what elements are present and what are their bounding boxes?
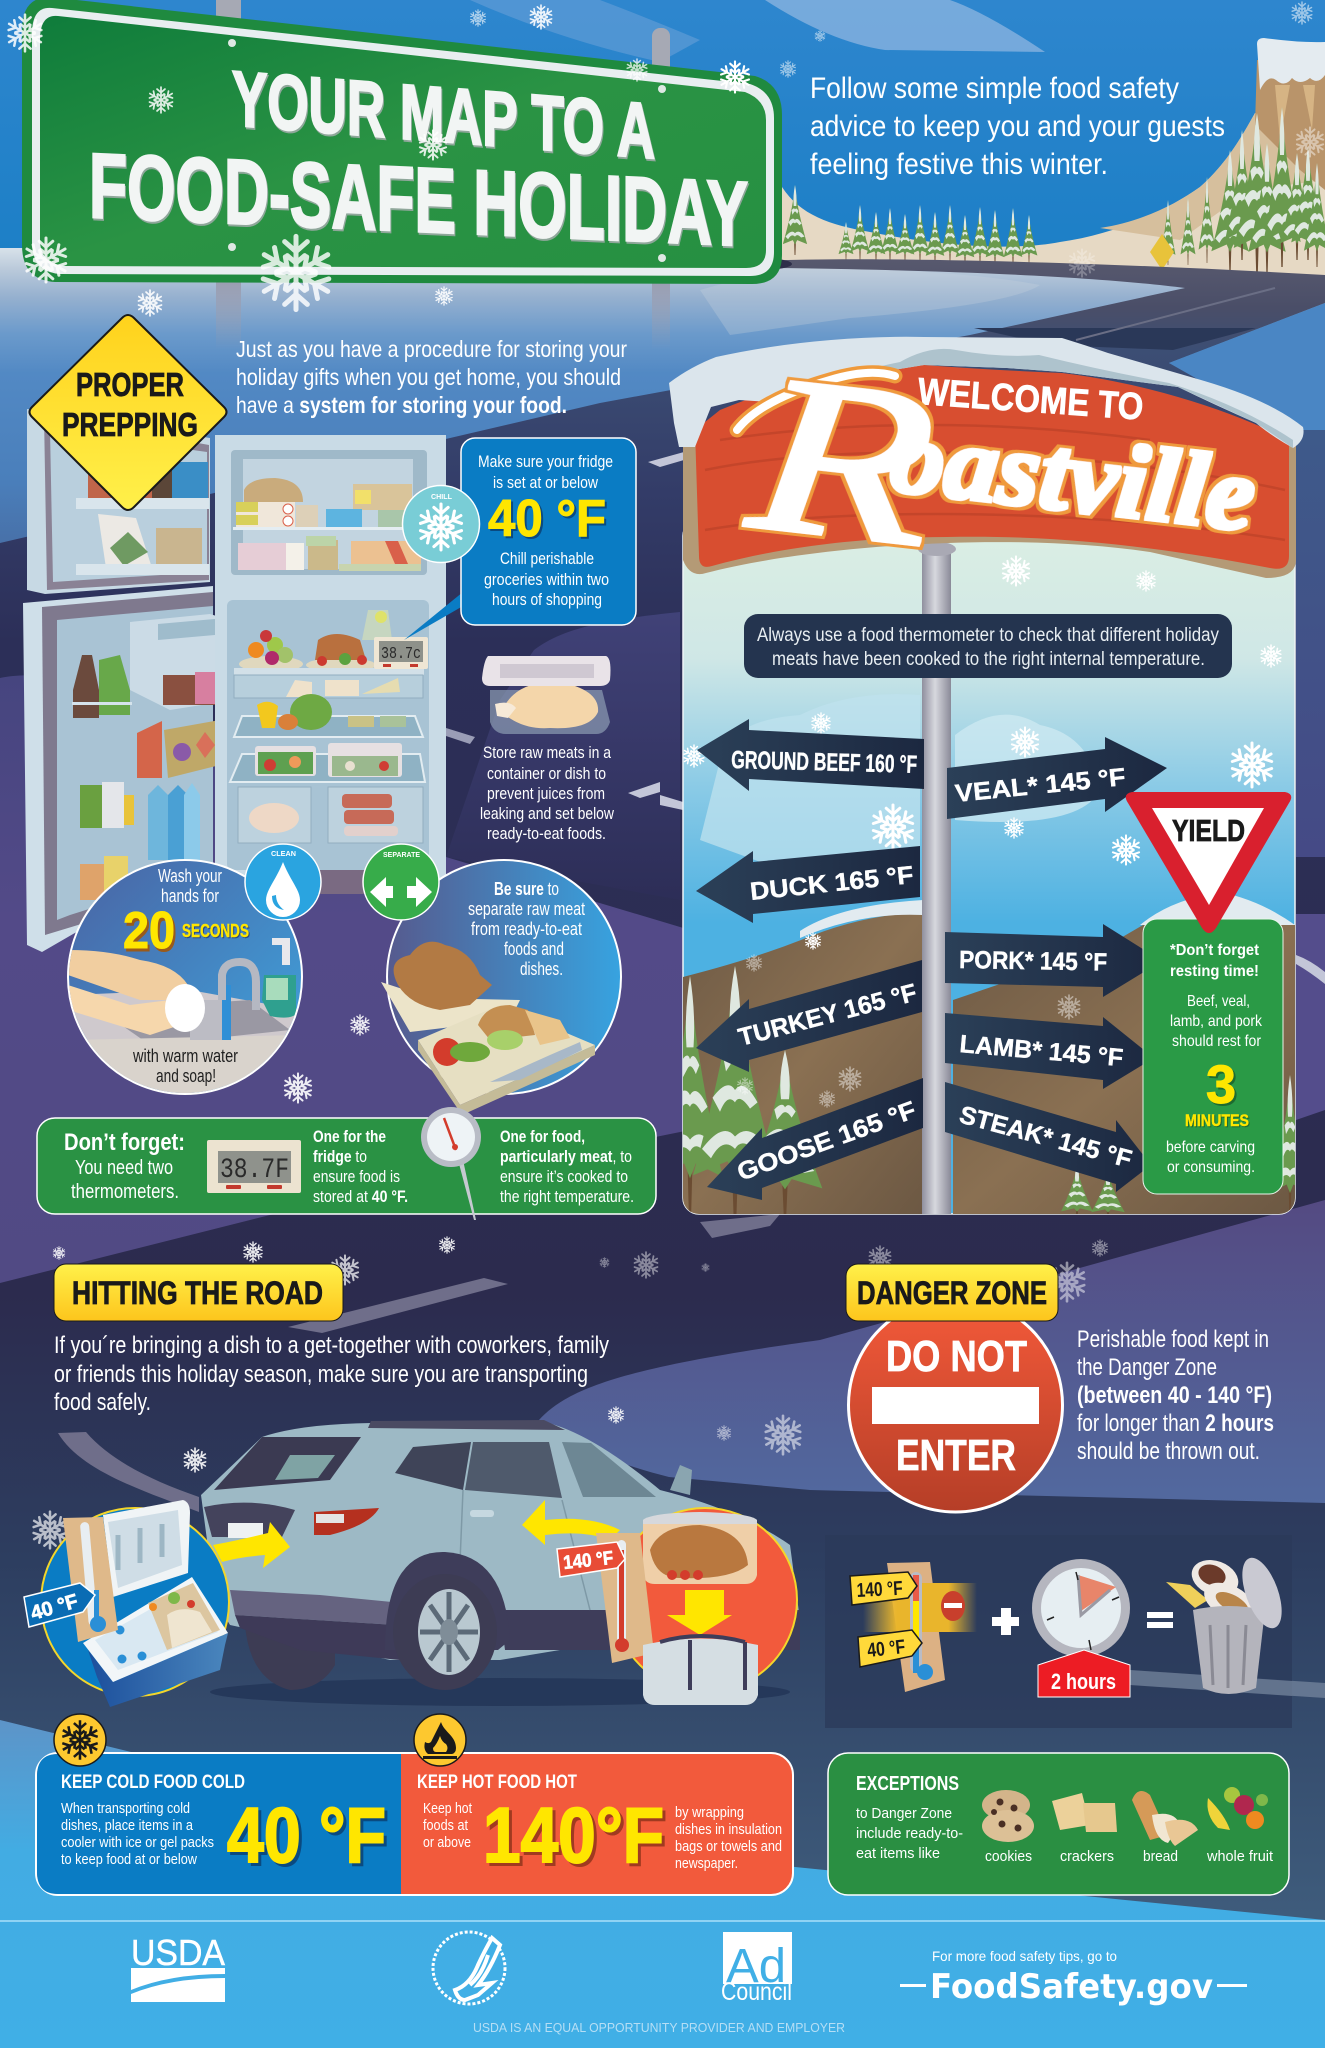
signpost pole <box>918 542 956 1214</box>
keep hot column: 140°F <box>483 1791 664 1879</box>
keep hot column: newspaper. <box>675 1856 738 1872</box>
illustration: open refrigerator <box>23 409 446 952</box>
icon: clock <box>1032 1559 1130 1657</box>
tag: 140 F <box>557 1542 625 1577</box>
intro text top right <box>810 72 1225 181</box>
keep hot column: bags or towels and <box>675 1839 782 1855</box>
intro text top right: Follow some simple food safety <box>810 72 1179 105</box>
panel: don't forget two thermometers: fridge to <box>313 1147 367 1166</box>
refrigerator door <box>23 586 233 952</box>
plus sign <box>992 1608 1019 1635</box>
text: USDA equal opportunity: USDA IS AN EQUAL OPPORTUNITY PROVIDER AND EMPLOYER <box>473 2021 845 2035</box>
icon: separate arrows badge: SEPARATE <box>383 850 420 859</box>
snow cap <box>669 337 1304 448</box>
logo: USDA: USDA <box>131 1932 225 1973</box>
panel: don't forget two thermometers: Don’t forget: <box>64 1129 185 1156</box>
do not enter sign <box>848 1298 1062 1512</box>
fridge shelves with food <box>230 610 425 843</box>
arrow: goose <box>707 1078 923 1200</box>
panel: don't forget two thermometers: You need two <box>75 1157 173 1179</box>
panel: separate circle <box>381 860 621 1115</box>
highway sign title <box>6 0 792 350</box>
welcome to Roastville sign <box>669 325 1304 630</box>
panel: wash hands circle: SECONDS <box>182 921 249 941</box>
arrow: steak: STEAK* 145 °F <box>956 1101 1135 1174</box>
section heading: hitting the road <box>54 1264 343 1321</box>
keep hot column <box>417 1772 782 1879</box>
resting time box: Beef, veal, <box>1187 993 1250 1010</box>
resting time box: should rest for <box>1172 1033 1262 1050</box>
illustration: SUV <box>201 1420 800 1706</box>
callout: fridge temperature: is set at or below <box>493 473 599 492</box>
panel: don't forget two thermometers: particularly meat, to <box>500 1147 632 1166</box>
intro paragraph: proper prepping: Just as you have a procedure for storing your <box>236 336 627 362</box>
tag: 140 F: 140 °F <box>562 1548 614 1574</box>
resting time box: before carving <box>1166 1139 1255 1156</box>
resting time box <box>1143 919 1283 1194</box>
panel: don't forget two thermometers: ensure it’s cooked to <box>500 1167 628 1186</box>
tag: 2 hours: 2 hours <box>1051 1669 1116 1694</box>
text: welcome to: WELCOME TO <box>916 371 1145 429</box>
text: hitting the road intro: food safely. <box>54 1389 151 1416</box>
callout: fridge temperature: hours of shopping <box>492 590 602 609</box>
text: danger zone rule: Perishable food kept in <box>1077 1326 1269 1353</box>
logo: Ad Council <box>721 1932 792 2006</box>
keep hot column: KEEP HOT FOOD HOT <box>417 1772 577 1793</box>
snowflakes: sky and mid page <box>31 2 1325 1548</box>
intro paragraph: proper prepping <box>236 336 627 418</box>
icon: digital thermometer <box>207 1140 301 1193</box>
text: store raw meats: ready-to-eat foods. <box>487 824 606 843</box>
illustration: cooler with ice <box>24 1500 229 1707</box>
info pill: always use a thermometer <box>744 614 1232 678</box>
icon: dial food thermometer <box>421 1107 481 1220</box>
keep cold column: KEEP COLD FOOD COLD <box>61 1772 245 1793</box>
panel: wash hands circle: hands for <box>161 886 219 906</box>
icon: trash can with food <box>1166 1553 1290 1694</box>
panel: keep cold / keep hot <box>36 1753 793 1895</box>
logo: USDA <box>131 1932 225 2002</box>
title: YOUR MAP TO A <box>232 54 655 175</box>
equals sign <box>1147 1612 1173 1628</box>
keep hot column: or above <box>423 1835 471 1851</box>
panel: exceptions: whole fruit <box>1206 1848 1274 1865</box>
text: danger zone rule: should be thrown out. <box>1077 1438 1260 1465</box>
intro text top right: advice to keep you and your guests <box>810 110 1225 143</box>
panel: exceptions: crackers <box>1060 1848 1114 1865</box>
icon: clean water drop badge: CLEAN <box>271 849 296 858</box>
text: danger zone rule <box>1077 1326 1274 1465</box>
text: store raw meats: prevent juices from <box>487 784 605 803</box>
proper prepping diamond sign: PROPER <box>76 366 184 403</box>
arrow: ground beef: GROUND BEEF 160 °F <box>731 746 918 779</box>
resting time box: lamb, and pork <box>1170 1013 1263 1030</box>
panel: danger zone equation <box>825 1535 1292 1728</box>
panel: don't forget two thermometers: One for food, <box>500 1127 585 1146</box>
keep cold column: cooler with ice or gel packs <box>61 1835 214 1851</box>
keep hot column: Keep hot <box>423 1801 472 1817</box>
icon: whole fruit <box>1207 1787 1268 1830</box>
panel: don't forget two thermometers: the right temperature. <box>500 1187 634 1206</box>
yield sign: YIELD <box>1172 813 1245 848</box>
panel: wash hands circle <box>68 860 302 1100</box>
keep cold column: 40 °F <box>227 1791 386 1879</box>
intro text top right: feeling festive this winter. <box>810 148 1108 181</box>
info pill: always use a thermometer: meats have been cooked to the right internal temperature. <box>772 649 1205 670</box>
text: store raw meats: container or dish to <box>487 764 606 783</box>
panel: wash hands circle: and soap! <box>156 1066 216 1086</box>
callout: fridge temperature: groceries within two <box>484 570 609 589</box>
panel: wash hands circle: 20 <box>123 902 175 960</box>
intro paragraph: proper prepping: holiday gifts when you get home, you should <box>236 364 621 390</box>
panel: exceptions <box>828 1753 1289 1895</box>
logo: HHS <box>433 1932 505 2004</box>
keep hot column: foods at <box>423 1818 468 1834</box>
tag: 40 F: 40 °F <box>28 1590 81 1625</box>
resting time box: resting time! <box>1170 963 1259 980</box>
link: FoodSafety.gov: For more food safety tips, go to <box>932 1948 1117 1964</box>
panel: don't forget two thermometers: ensure food is <box>313 1167 400 1186</box>
icon: hot flame badge <box>414 1714 466 1766</box>
panel: don't forget two thermometers: thermometers. <box>71 1181 179 1203</box>
title: FOOD-SAFE HOLIDAY <box>89 134 748 266</box>
intro paragraph: proper prepping: have a system for storing your food. <box>236 392 567 418</box>
panel: don't forget two thermometers: stored at 40 °F. <box>313 1187 408 1206</box>
panel: exceptions: eat items like <box>856 1845 940 1862</box>
panel: don't forget two thermometers: One for the <box>313 1127 386 1146</box>
text: danger zone rule: the Danger Zone <box>1077 1354 1217 1381</box>
link: FoodSafety.gov <box>900 1948 1247 2007</box>
freezer door <box>27 409 210 594</box>
text: hitting the road intro: If you´re bringing a dish to a get-together with coworkers, family <box>54 1332 609 1359</box>
illustration: hot food carrier <box>557 1508 797 1705</box>
thermometer in fridge <box>374 637 428 669</box>
text: Roastville script: oastville <box>885 397 1261 554</box>
text: Roastville script: R <box>737 325 946 594</box>
arrow: duck: DUCK 165 °F <box>749 861 915 906</box>
panel: wash hands circle: with warm water <box>132 1046 238 1066</box>
title <box>89 54 748 266</box>
keep cold column: to keep food at or below <box>61 1852 197 1868</box>
arrow: steak <box>945 1082 1151 1192</box>
icon: cookies <box>982 1790 1034 1842</box>
resting time box: *Don’t forget <box>1170 942 1260 959</box>
panel: Roastville meat temperatures <box>657 520 1309 1220</box>
keep cold column: When transporting cold <box>61 1801 190 1817</box>
tag: 2 hours <box>1038 1650 1130 1697</box>
arrow: turkey: TURKEY 165 °F <box>735 979 920 1052</box>
section heading: danger zone: DANGER ZONE <box>857 1275 1047 1311</box>
panel: separate circle: foods and <box>504 939 564 959</box>
icon: clean water drop badge <box>245 844 321 920</box>
resting time box: 3 <box>1206 1055 1236 1115</box>
text: hitting the road intro <box>54 1332 609 1416</box>
refrigerator body <box>215 435 446 894</box>
thermometer: cold <box>63 1517 118 1642</box>
arrow: to trunk <box>213 1522 290 1568</box>
icon: chill snowflake badge <box>402 486 480 562</box>
yield sign <box>1126 792 1291 933</box>
icon: bread <box>1132 1791 1198 1846</box>
section heading: danger zone <box>846 1264 1062 1512</box>
do not enter sign: ENTER <box>896 1431 1016 1480</box>
proper prepping diamond sign: PREPPING <box>62 406 198 443</box>
text: store raw meats <box>480 743 615 843</box>
arrow: turkey <box>696 960 922 1072</box>
text: hitting the road intro: or friends this holiday season, make sure you are transporting <box>54 1361 588 1388</box>
callout: fridge temperature: Chill perishable <box>500 549 594 568</box>
icon: thermometer danger band <box>850 1562 977 1692</box>
footer bar <box>0 1920 1325 2035</box>
logo: Ad Council: Council <box>721 1978 792 2006</box>
icon: thermometer danger band: 140 °F <box>856 1578 903 1602</box>
icon: digital thermometer: 38.7F <box>220 1155 289 1186</box>
panel: separate circle: dishes. <box>520 959 563 979</box>
arrow: pork <box>945 924 1162 997</box>
arrow: lamb <box>945 1013 1154 1089</box>
logo: Ad Council: Ad <box>726 1940 786 1993</box>
arrow: goose: GOOSE 165 °F <box>733 1096 920 1187</box>
link: FoodSafety.gov: FoodSafety.gov <box>930 1967 1213 2007</box>
panel: exceptions: include ready-to- <box>856 1825 963 1842</box>
resting time box: MINUTES <box>1185 1111 1249 1130</box>
icon: thermometer danger band: 40 °F <box>866 1636 906 1662</box>
icon: crackers <box>1052 1793 1117 1832</box>
keep cold column <box>61 1772 386 1879</box>
text: danger zone rule: for longer than 2 hours <box>1077 1410 1274 1437</box>
icon: raw chicken in container <box>482 656 610 734</box>
panel: exceptions: bread <box>1143 1848 1178 1865</box>
panel: don't forget two thermometers <box>37 1107 656 1220</box>
text: Roastville script <box>737 325 1267 630</box>
arrow: into passenger door <box>522 1500 620 1545</box>
arrow: duck <box>696 846 920 923</box>
panel: exceptions: EXCEPTIONS <box>856 1773 959 1795</box>
text: danger zone rule: (between 40 - 140 °F) <box>1077 1382 1272 1409</box>
icon: separate arrows badge <box>363 844 439 920</box>
tag: 40 F <box>24 1583 95 1627</box>
arrow: pork: PORK* 145 °F <box>959 946 1107 977</box>
keep hot column: by wrapping <box>675 1805 744 1821</box>
callout: fridge temperature: Make sure your fridge <box>478 452 613 471</box>
arrow: lamb: LAMB* 145 °F <box>958 1030 1124 1072</box>
panel: separate circle: from ready-to-eat <box>471 919 582 939</box>
text: store raw meats: leaking and set below <box>480 804 615 823</box>
keep cold column: dishes, place items in a <box>61 1818 194 1834</box>
keep hot column: dishes in insulation <box>675 1822 782 1838</box>
arrow: veal <box>947 737 1167 819</box>
panel: separate circle: separate raw meat <box>468 899 585 919</box>
do not enter sign: DO NOT <box>886 1332 1027 1381</box>
thermometer in fridge: 38.7c <box>381 645 421 664</box>
text: store raw meats: Store raw meats in a <box>483 743 611 762</box>
info pill: always use a thermometer: Always use a food thermometer to check that different holiday <box>757 625 1219 646</box>
icon: chill snowflake badge: CHILL <box>431 492 452 501</box>
arrow: ground beef <box>697 719 924 791</box>
callout: fridge temperature <box>404 438 636 640</box>
section heading: hitting the road: HITTING THE ROAD <box>72 1275 323 1311</box>
arrow: veal: VEAL* 145 °F <box>954 763 1127 808</box>
resting time box: or consuming. <box>1167 1159 1255 1176</box>
callout: fridge temperature: 40 °F <box>488 490 606 548</box>
icon: cold snowflake badge <box>54 1714 106 1766</box>
panel: separate circle: Be sure to <box>494 879 559 899</box>
panel: wash hands circle: Wash your <box>158 866 222 886</box>
thermometer: hot <box>596 1533 654 1663</box>
proper prepping diamond sign <box>30 315 226 510</box>
panel: exceptions: to Danger Zone <box>856 1805 952 1822</box>
panel: exceptions: cookies <box>985 1848 1032 1865</box>
